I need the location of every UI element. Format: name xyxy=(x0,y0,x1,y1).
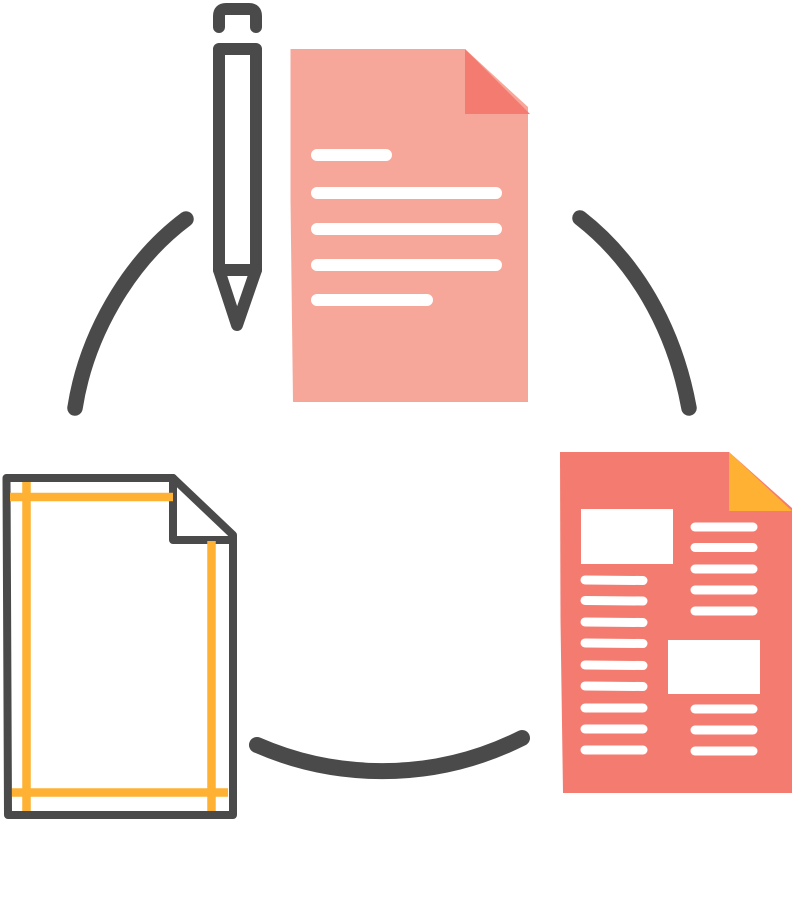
document: blank template with margins xyxy=(6,478,233,815)
arc arrow: right xyxy=(580,218,689,408)
document: page layout xyxy=(560,452,792,793)
document: manuscript xyxy=(290,49,530,402)
arc arrow: left xyxy=(75,219,186,408)
icon: pencil xyxy=(219,9,256,325)
arc arrow: bottom xyxy=(257,738,522,771)
